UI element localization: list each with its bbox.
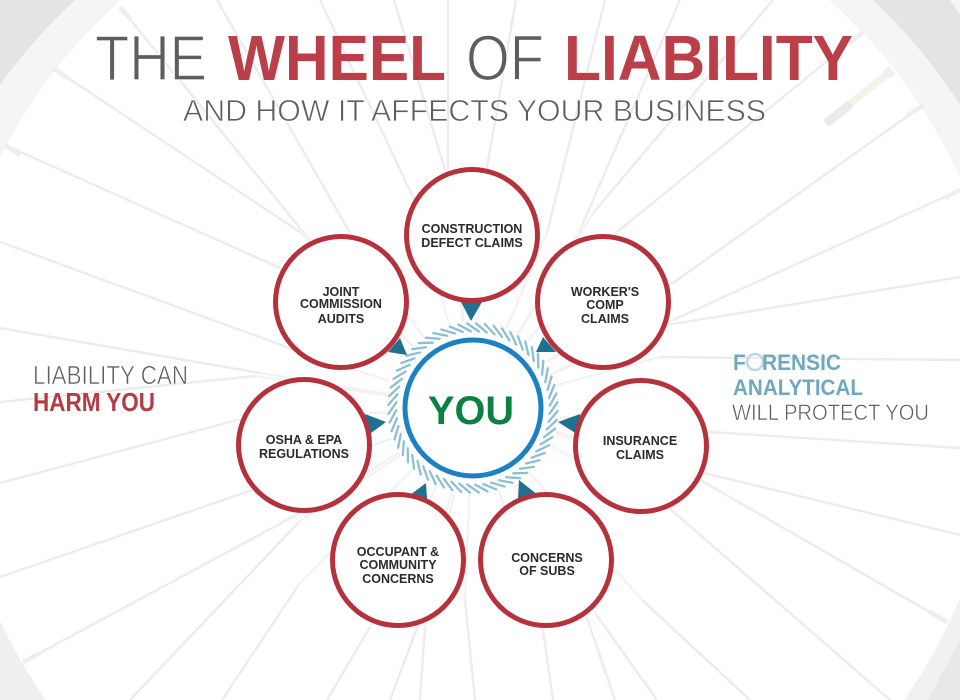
circle: construction defect claims [406,170,538,300]
circle: joint commission audits: AUDITS [318,312,364,326]
subtitle: AND HOW IT AFFECTS YOUR BUSINESS [183,93,766,128]
circle: worker's comp claims: CLAIMS [581,312,629,326]
title: WHEEL [228,22,446,94]
left callout: liability can harm you: HARM YOU [33,387,155,417]
circle: OSHA and EPA regulations: OSHA & EPA [266,433,342,447]
circle: joint commission audits [276,236,406,368]
right callout: Forensic Analytical will protect you: ANALYTICAL [733,375,863,400]
right callout: Forensic Analytical will protect you: WILL PROTECT YOU [732,400,929,425]
circle: occupant and community concerns [332,494,464,626]
circle: occupant and community concerns: CONCERNS [362,572,434,586]
circle: construction defect claims: CONSTRUCTION [422,222,522,236]
centre circle: you [405,340,541,476]
hatched ring [388,323,558,493]
circle: occupant and community concerns: OCCUPANT & [357,545,439,559]
arrow: construction defect claims [461,302,482,321]
circle: insurance claims: INSURANCE [603,434,677,448]
title [95,22,853,94]
circle: worker's comp claims: COMP [586,298,624,312]
right callout: Forensic Analytical will protect you: FORENSIC [733,350,841,375]
circle: joint commission audits: COMMISSION [300,297,382,311]
circle: OSHA and EPA regulations: REGULATIONS [259,447,349,461]
circle: insurance claims: CLAIMS [616,448,664,462]
circle: insurance claims [576,380,706,512]
right callout: Forensic Analytical will protect you [732,350,929,425]
circle: joint commission audits: JOINT [323,285,360,299]
circle: occupant and community concerns: COMMUNITY [359,558,437,572]
left callout: liability can harm you [33,360,188,417]
circle: worker's comp claims: WORKER'S [571,285,639,299]
title: LIABILITY [564,22,853,94]
circle: concerns of subs: OF SUBS [519,564,575,578]
logo ring in Forensic [747,354,763,370]
arrow: occupant and community concerns [410,483,427,499]
circle: construction defect claims: DEFECT CLAIMS [421,236,523,250]
arrow: OSHA and EPA regulations [365,414,386,436]
title: THE [95,22,207,94]
circle: concerns of subs: CONCERNS [511,551,583,565]
title: OF [466,22,544,94]
arrow: joint commission audits [388,338,407,355]
left callout: liability can harm you: LIABILITY CAN [33,360,188,390]
icon: tyre valve [829,70,892,121]
circle: concerns of subs [480,494,612,626]
circle: OSHA and EPA regulations [238,380,370,510]
arrow: insurance claims [558,414,580,436]
circle: worker's comp claims [538,236,668,368]
centre circle: you: YOU [428,389,514,433]
arrow: worker's comp claims [536,337,556,352]
arrow: concerns of subs [518,480,538,499]
